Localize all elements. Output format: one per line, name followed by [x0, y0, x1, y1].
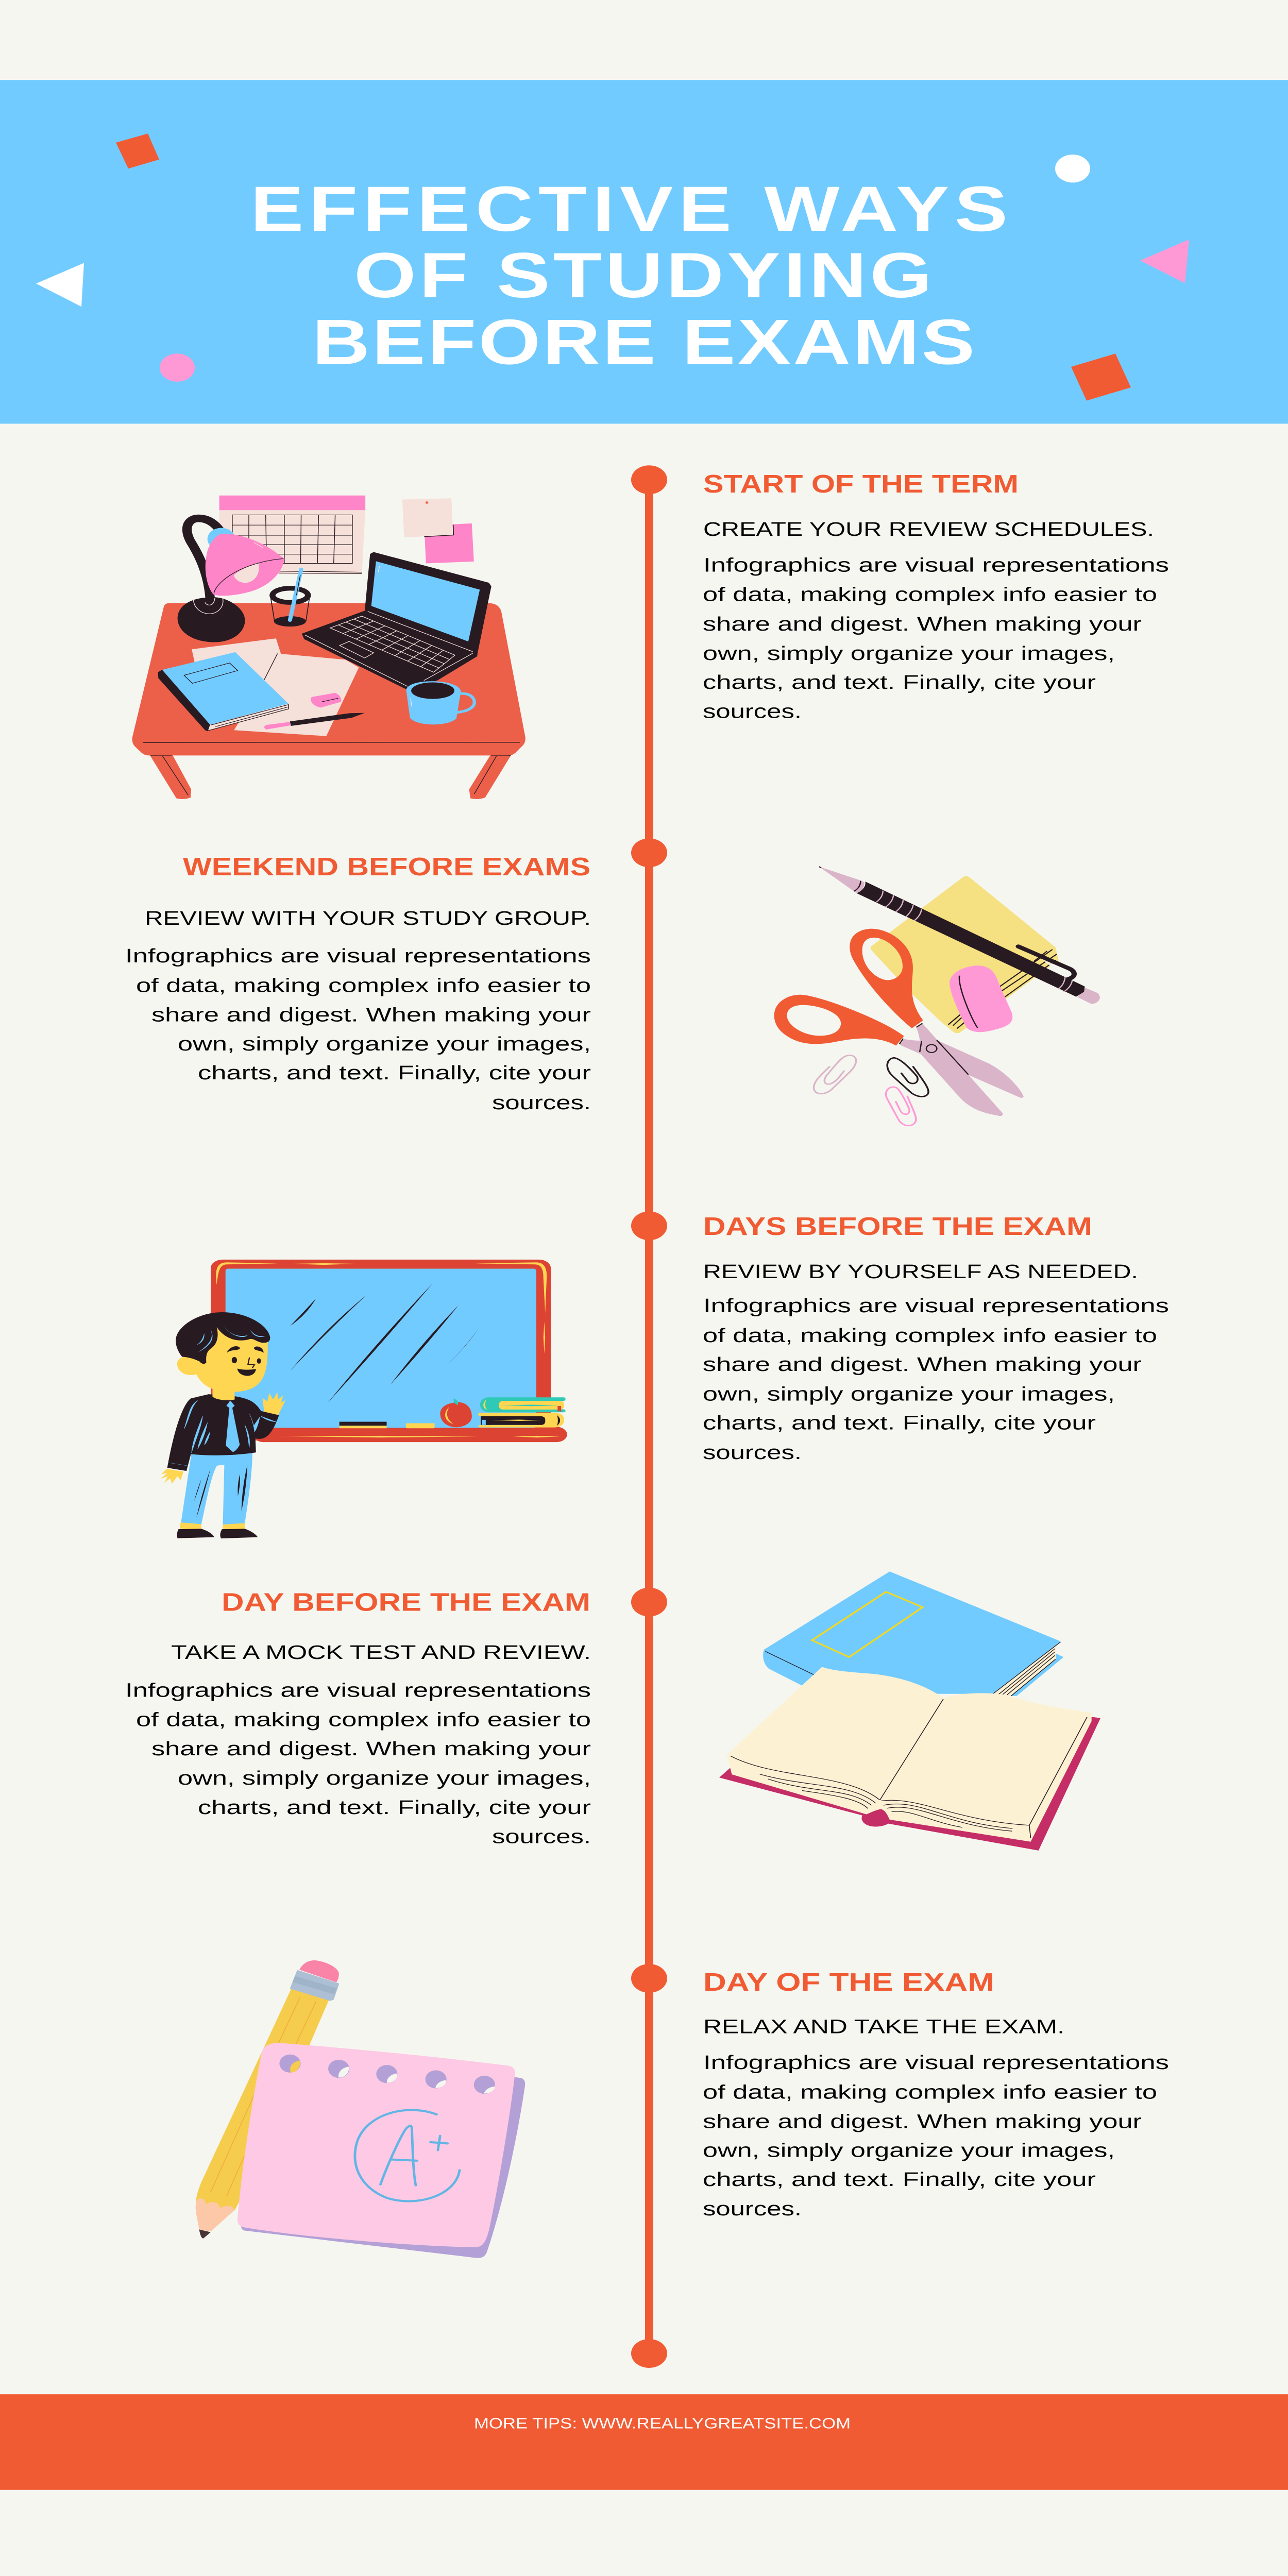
- socks and shoes: [177, 1522, 258, 1538]
- step 1 text: start of the term: of data, making complex info easier to: [703, 584, 1157, 605]
- chalk: [406, 1423, 435, 1428]
- papers: [192, 638, 359, 736]
- paper clip: pink: [886, 1087, 916, 1126]
- illustration: study desk: [132, 496, 526, 799]
- note pad backing: [241, 2077, 525, 2258]
- title: BEFORE EXAMS: [312, 306, 975, 378]
- icon: pink triangle: [1140, 240, 1189, 283]
- step 3 text: days before the exam: REVIEW BY YOURSELF AS NEEDED.: [703, 1261, 1138, 1283]
- frame highlights: [216, 1262, 560, 1437]
- step 4 text: day before the exam: of data, making complex info easier to: [136, 1709, 591, 1731]
- step 4 text: day before the exam: share and digest. When making your: [151, 1738, 591, 1760]
- step 1 text: start of the term: charts, and text. Finally, cite your: [703, 671, 1096, 693]
- step 4 text: day before the exam: DAY BEFORE THE EXAM: [222, 1587, 590, 1616]
- step 2 text: weekend before exams: of data, making complex info easier to: [136, 975, 591, 996]
- desk edge line: [143, 741, 520, 743]
- step 1 text: start of the term: own, simply organize your images,: [703, 642, 1115, 665]
- title: OF STUDYING: [354, 240, 932, 311]
- icon: orange square top left: [116, 133, 159, 168]
- step 5 text: day of the exam: of data, making complex info easier to: [703, 2081, 1157, 2103]
- step 2 text: weekend before exams: charts, and text. Finally, cite your: [198, 1062, 591, 1084]
- title: EFFECTIVE WAYS: [250, 173, 1008, 245]
- step 3 text: days before the exam: own, simply organize your images,: [703, 1383, 1115, 1405]
- jacket: [167, 1394, 279, 1471]
- closed blue book: [763, 1571, 1063, 1696]
- scissors: [774, 929, 1024, 1116]
- paper clip: dark: [887, 1058, 928, 1096]
- step 2 text: weekend before exams: [125, 852, 591, 1114]
- note pad sheet: [238, 2043, 515, 2247]
- calendar: [219, 496, 365, 574]
- pink eraser: [950, 965, 1012, 1032]
- step 3 text: days before the exam: sources.: [703, 1442, 802, 1464]
- step 2 text: weekend before exams: sources.: [492, 1092, 591, 1114]
- step 1 text: start of the term: START OF THE TERM: [703, 469, 1019, 498]
- open book: [719, 1667, 1100, 1851]
- step 5 text: day of the exam: share and digest. When making your: [703, 2111, 1142, 2132]
- step 2 text: weekend before exams: Infographics are visual representations: [125, 945, 591, 967]
- books: [478, 1397, 566, 1428]
- step 5 text: day of the exam: Infographics are visual representations: [703, 2052, 1169, 2074]
- step 3 text: days before the exam: [703, 1212, 1169, 1464]
- illustration: scissors, pen, eraser and paper clips: [774, 867, 1100, 1126]
- eraser: [311, 693, 341, 708]
- step 3 text: days before the exam: share and digest. When making your: [703, 1353, 1142, 1376]
- step 5 text: day of the exam: DAY OF THE EXAM: [703, 1968, 994, 1996]
- chalkboard: [211, 1260, 567, 1442]
- grade mark: A+: [355, 2110, 460, 2201]
- step 3 text: days before the exam: Infographics are visual representations: [703, 1295, 1169, 1317]
- step 1 text: start of the term: CREATE YOUR REVIEW SCHEDULES.: [703, 518, 1154, 540]
- desk lamp: [178, 518, 284, 642]
- step 1 text: start of the term: Infographics are visual representations: [703, 554, 1169, 576]
- header banner: [0, 80, 1288, 423]
- paper clip: lilac: [814, 1055, 856, 1094]
- hands: [161, 1392, 285, 1484]
- step 5 text: day of the exam: [703, 1968, 1169, 2220]
- step 5 text: day of the exam: sources.: [703, 2198, 802, 2220]
- head: [176, 1312, 270, 1400]
- board eraser: [340, 1422, 387, 1428]
- step 4 text: day before the exam: Infographics are visual representations: [125, 1680, 591, 1701]
- chalk marks: [290, 1284, 479, 1403]
- icon: orange square bottom right: [1071, 353, 1131, 401]
- mug: [406, 681, 474, 724]
- step 3 text: days before the exam: DAYS BEFORE THE EXAM: [703, 1212, 1092, 1240]
- step 4 text: day before the exam: charts, and text. Finally, cite your: [198, 1797, 591, 1819]
- laptop: [302, 552, 492, 690]
- illustration: pencil and graded note: [196, 1960, 525, 2258]
- step 1 text: start of the term: [703, 469, 1169, 722]
- mechanical pencil: [819, 867, 1100, 1004]
- step 4 text: day before the exam: [125, 1587, 591, 1848]
- step 1 text: start of the term: sources.: [703, 701, 802, 722]
- footer text: MORE TIPS: WWW.REALLYGREATSITE.COM: [474, 2415, 851, 2432]
- pencil: [264, 713, 365, 730]
- icon: pink circle: [160, 353, 195, 382]
- footer bar: [0, 2394, 1288, 2490]
- yellow note pad: [871, 876, 1059, 1033]
- notebook: [158, 652, 289, 732]
- boy: [161, 1312, 285, 1538]
- title: [250, 173, 1008, 378]
- step 4 text: day before the exam: sources.: [492, 1826, 591, 1848]
- pencil: [196, 1960, 339, 2239]
- step 5 text: day of the exam: charts, and text. Finally, cite your: [703, 2169, 1096, 2191]
- step 1 text: start of the term: share and digest. When making your: [703, 613, 1142, 635]
- step 2 text: weekend before exams: REVIEW WITH YOUR STUDY GROUP.: [145, 908, 591, 929]
- step 2 text: weekend before exams: own, simply organize your images,: [178, 1033, 591, 1055]
- illustration: boy at chalkboard: [161, 1260, 567, 1538]
- step 3 text: days before the exam: charts, and text. Finally, cite your: [703, 1412, 1096, 1434]
- step 4 text: day before the exam: own, simply organize your images,: [178, 1767, 591, 1789]
- step 5 text: day of the exam: own, simply organize your images,: [703, 2140, 1115, 2161]
- desk legs: [150, 755, 511, 799]
- trousers: [181, 1452, 252, 1524]
- pen cup: [270, 569, 310, 626]
- icon: white circle: [1055, 155, 1090, 182]
- apple: [440, 1398, 472, 1427]
- icon: white triangle: [36, 263, 84, 307]
- step 2 text: weekend before exams: WEEKEND BEFORE EXAMS: [183, 852, 590, 881]
- timeline: [631, 465, 667, 2368]
- step 3 text: days before the exam: of data, making complex info easier to: [703, 1325, 1157, 1347]
- step 5 text: day of the exam: RELAX AND TAKE THE EXAM.: [703, 2016, 1064, 2038]
- desk top: [132, 603, 526, 755]
- illustration: books: [719, 1571, 1100, 1851]
- sticky notes: [402, 498, 474, 564]
- step 2 text: weekend before exams: share and digest. When making your: [151, 1004, 591, 1026]
- binding holes: [279, 2055, 495, 2094]
- tie: [226, 1400, 240, 1452]
- step 4 text: day before the exam: TAKE A MOCK TEST AND REVIEW.: [171, 1641, 591, 1664]
- jacket highlights: [168, 1400, 277, 1466]
